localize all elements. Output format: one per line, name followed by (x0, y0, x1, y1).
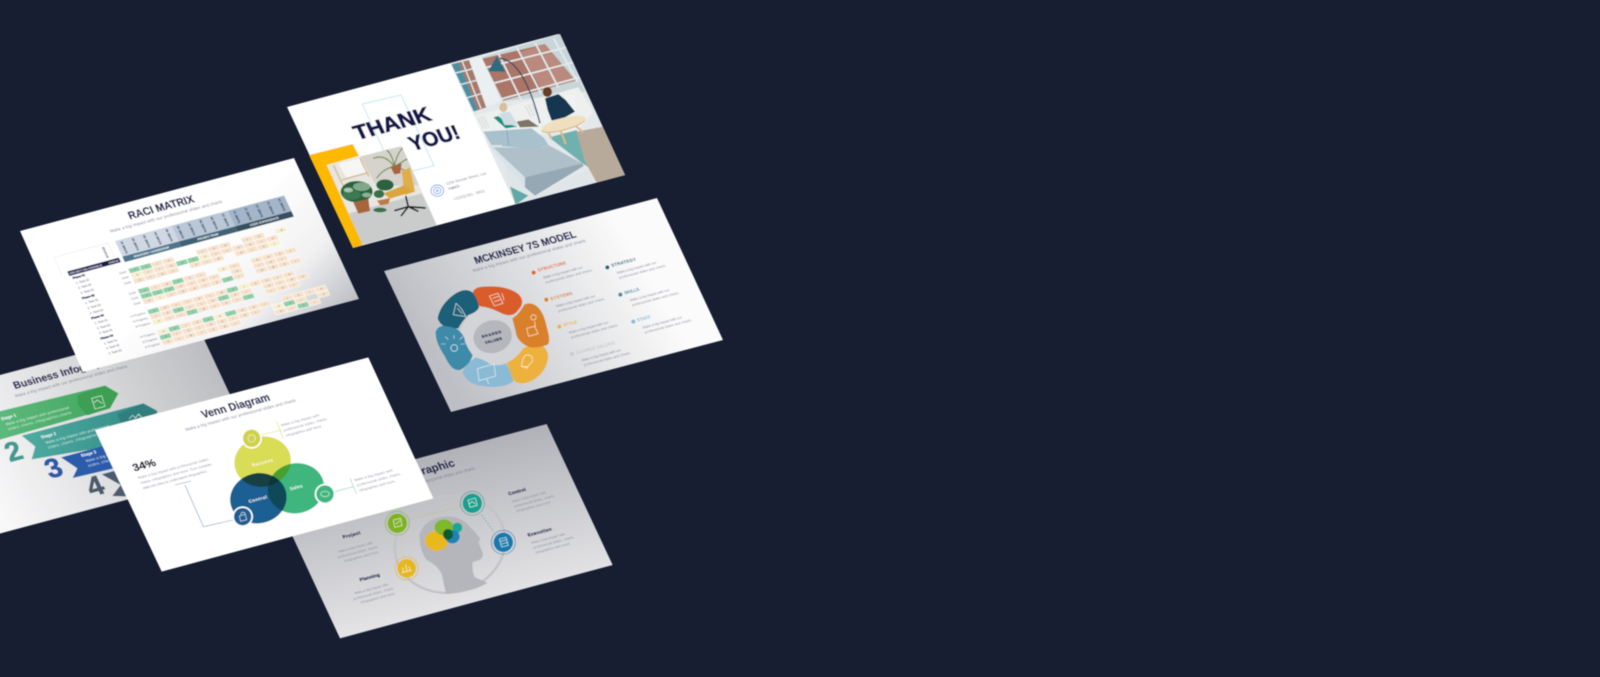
node: planning (395, 557, 418, 580)
task list: 2. Task 02 (96, 323, 111, 330)
item: systems: professional slides and charts. (557, 297, 606, 313)
item: staff: professional slides and charts. (644, 318, 693, 334)
heading: Brain Infographic (361, 458, 457, 493)
cell letters: CIIARACIICAIC (136, 236, 275, 277)
column names: NAME 13 (254, 204, 264, 218)
column names: NAME 12 (243, 207, 253, 221)
status column: In Progress (132, 316, 149, 324)
circle labels: Sales (289, 483, 304, 491)
item: shared values (570, 338, 632, 368)
header band light (115, 195, 291, 257)
cell letters: CIRICAICIRI (167, 300, 316, 344)
item: style: STYLE (562, 319, 578, 328)
shared values hub: VALUES (484, 337, 503, 345)
column names: NAME 11 (232, 210, 242, 224)
stage 1 arrow: slides, charts, infographics charts (7, 411, 72, 431)
item: style (557, 310, 619, 340)
stage 2 arrow: Stage 2 (40, 431, 58, 440)
body: stat: Make a big impact with professional slides, (137, 457, 210, 480)
column names: NAME 01 (119, 240, 129, 254)
yellow block (309, 144, 363, 248)
task list: Phase 01 (72, 273, 86, 280)
column names: NAME 15 (277, 198, 287, 212)
brain bubbles (425, 519, 462, 551)
status column: In Progress (130, 311, 147, 318)
item: strategy: STRATEGY (610, 257, 637, 268)
stage 3 arrow (39, 436, 152, 484)
cell letters: ARICICAICR (133, 228, 283, 272)
header band dark: MANAGER / LEADERSHIP (133, 245, 170, 258)
panel: McKinsey 7S slide (384, 198, 723, 412)
photo: living room (445, 30, 632, 207)
label: execution: Make a big impact with (530, 532, 566, 545)
status column: Done (133, 301, 142, 306)
node: execution (491, 530, 515, 554)
status column: In Progress (135, 321, 151, 329)
stage 2 arrow: slides, charts, infographics charts (47, 429, 112, 450)
column names: NAME 02 (131, 237, 140, 251)
cell letters: ACIICIRAICCIA (152, 272, 291, 313)
column names: NAME 14 (266, 201, 275, 215)
column names: NAME 05 (164, 228, 174, 242)
item: staff: Make a big impact with our (642, 315, 684, 330)
heading: Business Infographic (12, 354, 118, 392)
item: structure: professional slides and charts. (545, 268, 593, 284)
cell letters: AICRCIAICACI (143, 249, 292, 292)
label: control (507, 481, 558, 513)
status column: Done (130, 295, 139, 301)
label: execution: professional slides, charts, (533, 535, 575, 550)
body: stat: charts, infographics and more. Turn complex (140, 462, 213, 485)
connectors (175, 422, 357, 527)
status column: Done (121, 275, 130, 280)
outlined frame (362, 95, 434, 175)
label: planning: Planning (359, 572, 381, 582)
stage 3 arrow: Make a big impact with professional (85, 443, 150, 463)
cell letters: RARCICIAICI (145, 257, 283, 297)
label: planning: professional slides, charts, (353, 586, 395, 601)
icon: location (431, 185, 444, 196)
label: project: infographics and more. (344, 550, 380, 563)
task list: Phase 04 (100, 333, 114, 341)
stage 1 arrow (0, 386, 118, 441)
contact text: Angeles CA (447, 184, 461, 191)
item: shared values: Make a big impact with our (581, 348, 623, 362)
badge: control (232, 506, 253, 527)
task list: 3. Task 03 (108, 348, 123, 355)
panel: brain infographic slide (274, 424, 613, 638)
status column: In Progress (142, 336, 159, 344)
numeral 2: 2 (0, 435, 28, 467)
item: structure: STRUCTURE (537, 260, 567, 273)
cell letters: RICIACICIARIC (164, 292, 326, 338)
label: project (329, 528, 381, 564)
label: project: Make a big impact with (338, 541, 373, 554)
item: skills (618, 278, 680, 308)
item: staff: STAFF (636, 314, 652, 323)
shared values hub (470, 316, 516, 357)
body: stat (137, 457, 215, 490)
heading: Venn Diagram (200, 392, 272, 421)
item: skills: Make a big impact with our (629, 288, 671, 302)
item: skills: professional slides and charts. (631, 291, 680, 307)
body: top: infographics and more. (285, 424, 323, 438)
green cells (128, 229, 310, 346)
peach cells (128, 223, 332, 346)
subtitle: Make a big impact with our professional slides and charts (368, 466, 476, 499)
cell letters: ICRIICACICIAC (155, 274, 305, 318)
column names: NAME 07 (187, 222, 197, 236)
header band dark (122, 211, 294, 262)
body: right: professional slides, charts, (356, 472, 402, 487)
task list: Phase 02 (81, 293, 96, 300)
heading: RACI MATRIX (126, 194, 197, 222)
item: style: Make a big impact with our (568, 320, 610, 335)
body: top (280, 412, 331, 438)
deliverables header: PROJECT DELIVERABLE (69, 263, 103, 275)
numeral 3: 3 (39, 452, 68, 484)
heading: MCKINSEY 7S MODEL (473, 230, 578, 267)
label: execution: Execution (527, 527, 553, 538)
ring centre (453, 298, 533, 375)
stage 2 arrow: Make a big impact with professional (45, 424, 110, 445)
stage 3 arrow: slides, charts, infographics charts (87, 447, 152, 468)
header band dark: PROJECT TEAM (197, 232, 220, 241)
task list: 1. Task 01 (103, 338, 118, 345)
cell letters: CIICAICAICRCI (148, 259, 297, 302)
column names: STATUS (101, 246, 110, 258)
head silhouette (419, 516, 487, 594)
body: right (354, 467, 404, 493)
task list: 3. Task 03 (89, 308, 104, 315)
item: structure (532, 255, 593, 285)
subtitle: Make a big impact with our professional slides and charts (14, 364, 128, 398)
panel: RACI matrix slide (20, 158, 359, 372)
body: stat: data into easy to understand infographics. (142, 469, 208, 490)
task list: 1. Task 01 (75, 278, 90, 285)
item: shared values: SHARED VALUES (575, 340, 616, 355)
item: staff (631, 305, 693, 335)
status column: Done (123, 280, 132, 286)
body: right: infographics and more. (358, 479, 396, 493)
column names (101, 198, 287, 259)
item: style: professional slides and charts. (570, 323, 619, 339)
body: top: Make a big impact with (280, 413, 320, 427)
badge: sales (315, 484, 335, 504)
subtitle: Make a big impact with our professional slides and charts (472, 238, 586, 273)
column names: NAME 09 (209, 216, 219, 230)
shared values hub: SHARED (481, 330, 502, 339)
stage 1 arrow: Stage 1 (0, 413, 18, 421)
panel: thank you slide (287, 30, 632, 250)
circle labels: Success (251, 457, 274, 468)
cell letters: CRICACIACIICIC (162, 287, 323, 333)
item: strategy: professional slides and charts. (618, 264, 667, 280)
status column (111, 270, 161, 349)
task list: 2. Task 02 (77, 283, 92, 290)
circle labels (248, 457, 304, 504)
numeral 4: 4 (81, 470, 110, 502)
contact text: +1(323) 561 - 8910 (453, 189, 485, 201)
label: execution: infographics and more. (535, 542, 571, 555)
column names: NAME 04 (153, 231, 163, 245)
label: control: Make a big impact with (511, 491, 547, 503)
petal icons (441, 293, 538, 384)
item: strategy: Make a big impact with our (616, 261, 658, 275)
task list: 2. Task 02 (87, 303, 102, 310)
panel: business infographic slide (0, 323, 262, 536)
label: planning (345, 570, 397, 606)
task list: 3. Task 03 (80, 288, 95, 295)
stage 1 arrow: Make a big impact with professional (5, 406, 70, 426)
table outline (54, 243, 116, 275)
label: project: Project (342, 530, 362, 540)
subtitle: Make a big impact with our professional slides and charts (184, 398, 297, 432)
deliverables header (67, 258, 121, 276)
yellow cells (128, 226, 319, 340)
venn circles (229, 436, 324, 524)
table (54, 195, 333, 362)
task list: 1. Task 01 (84, 298, 99, 305)
deliverables header: STATUS (108, 259, 119, 265)
column names: NAME 06 (176, 225, 185, 239)
task list: 2. Task 02 (105, 343, 120, 350)
showcase scene (0, 33, 724, 639)
status column: In Progress (139, 331, 156, 339)
body: right: Make a big impact with (354, 468, 393, 482)
item: structure: Make a big impact with our (543, 265, 584, 280)
label: control: infographics and more. (516, 500, 552, 513)
panel: Venn diagram slide (95, 357, 433, 572)
circle labels: Control (248, 495, 268, 504)
subtitle: Make a big impact with our professional slides and charts (109, 199, 223, 234)
status column: In Progress (144, 342, 161, 349)
label: planning: infographics and more. (360, 591, 396, 604)
contact text (445, 172, 487, 201)
badge: success (241, 428, 262, 449)
contact text: 1234 Sinclair Street, Los (445, 172, 487, 186)
task list: Phase 03 (90, 313, 105, 320)
item: systems: SYSTEMS (549, 291, 573, 301)
photo: plants and chair (326, 146, 437, 245)
task list: 1. Task 01 (94, 318, 109, 325)
dashed connectors (402, 507, 494, 557)
cell letters: CIAICIRAICI (138, 242, 276, 282)
task list: 3. Task 03 (98, 328, 113, 335)
stage 4 arrow (81, 467, 133, 502)
label: project: professional slides, charts, (337, 545, 379, 559)
node: project (385, 511, 409, 535)
cell letters: CIICRICIAICI (157, 283, 295, 323)
label: execution (527, 522, 577, 555)
stage 3 arrow: Stage 3 (80, 449, 98, 458)
heading: thank you: THANK (350, 103, 435, 145)
label: control: Control (507, 487, 527, 496)
status column: Done (119, 270, 127, 275)
column names: NAME 10 (221, 213, 230, 227)
heading: thank you: YOU! (405, 122, 464, 156)
label: planning: Make a big impact with (354, 583, 389, 595)
status column: Done (128, 290, 137, 296)
column names: NAME 08 (198, 219, 208, 233)
node: control (460, 491, 484, 515)
item: shared values: professional slides and charts. (583, 351, 632, 367)
stat: 34%: 34% (131, 457, 159, 474)
cell letters (133, 225, 328, 344)
petals (436, 286, 549, 387)
item: strategy (605, 250, 667, 280)
body: top: professional slides, charts, (283, 417, 328, 432)
label: control: professional slides, charts, (513, 494, 556, 508)
task list (72, 273, 123, 356)
header band dark: USER EXPERIENCE (249, 216, 280, 227)
column names: NAME 03 (142, 234, 152, 248)
item: systems (544, 284, 606, 314)
heading: thank you (350, 103, 487, 201)
ring (384, 483, 516, 605)
item: skills: SKILLS (623, 287, 640, 295)
stage 2 arrow (0, 403, 157, 467)
item: systems: Make a big impact with our (555, 294, 597, 308)
